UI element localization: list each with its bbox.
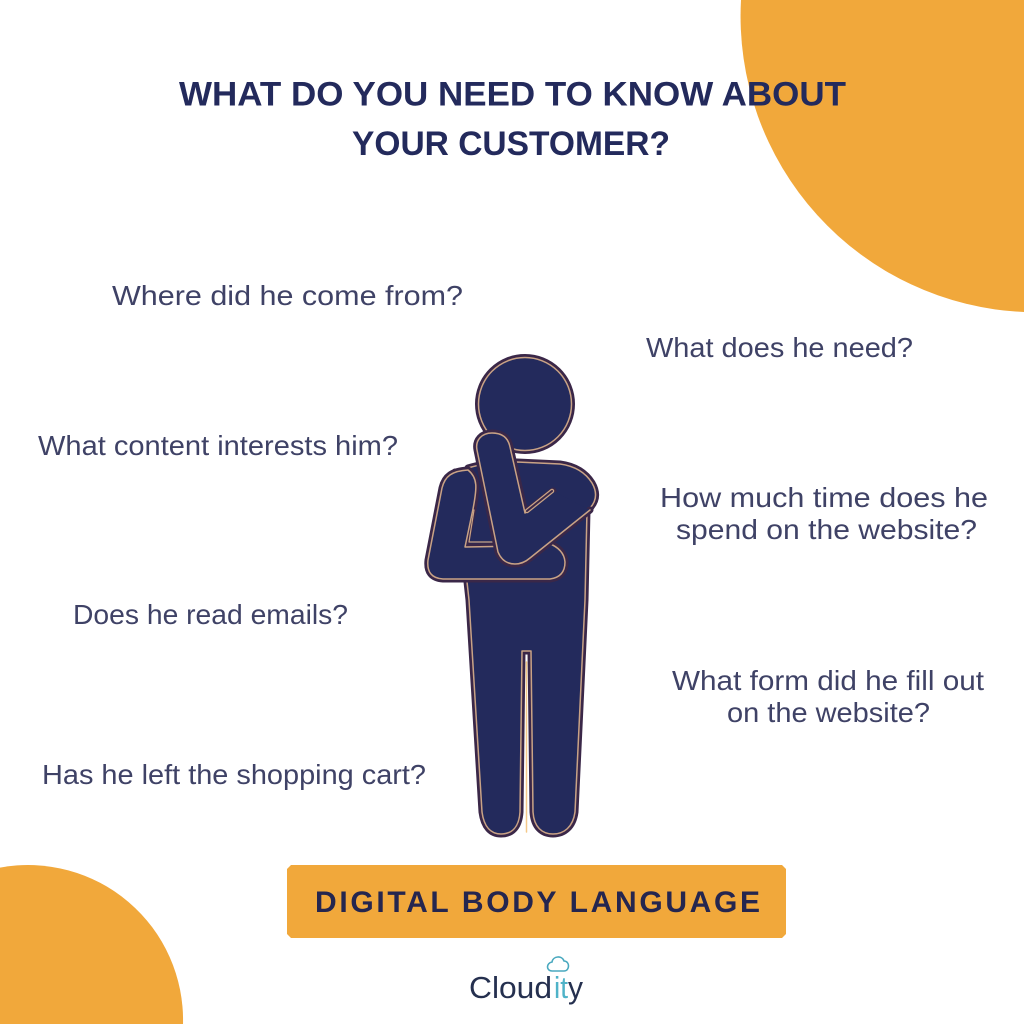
banner: digital body language (287, 865, 786, 938)
figure: raised forearm (477, 433, 590, 564)
question: time on website: How much time does he (660, 482, 988, 513)
question: time on website (660, 482, 988, 545)
question: what does he need: What does he need? (646, 332, 913, 363)
question: where did he come from: Where did he come from? (112, 280, 463, 311)
icon: cloud (548, 957, 568, 971)
question: form filled out (672, 665, 984, 728)
banner: digital body language: DIGITAL BODY LANGUAGE (315, 886, 760, 919)
question: form filled out: What form did he fill out (672, 665, 984, 696)
title: YOUR CUSTOMER? (352, 125, 670, 163)
figure: shoulders and upper arm (468, 462, 596, 556)
question: does he read emails: Does he read emails? (73, 599, 348, 630)
title (179, 76, 846, 163)
figure: head (478, 358, 572, 450)
question: form filled out: on the website? (727, 697, 930, 728)
logo: Cloudity: it (554, 970, 568, 1005)
question: shopping cart: Has he left the shopping cart? (42, 759, 426, 790)
figure: folded arm (428, 470, 565, 579)
decorative circle: top right (741, 0, 1024, 312)
question: time on website: spend on the website? (676, 514, 977, 545)
figure: body and legs (455, 472, 587, 834)
title: WHAT DO YOU NEED TO KNOW ABOUT (179, 76, 846, 114)
logo: Cloudity: y (568, 970, 583, 1005)
question: what content interests him: What content interests him? (38, 430, 398, 461)
decorative circle: bottom left (0, 865, 183, 1024)
logo: Cloudity (469, 957, 583, 1005)
icon: thinking person figure (428, 358, 596, 834)
logo: Cloudity: Cloud (469, 970, 552, 1005)
